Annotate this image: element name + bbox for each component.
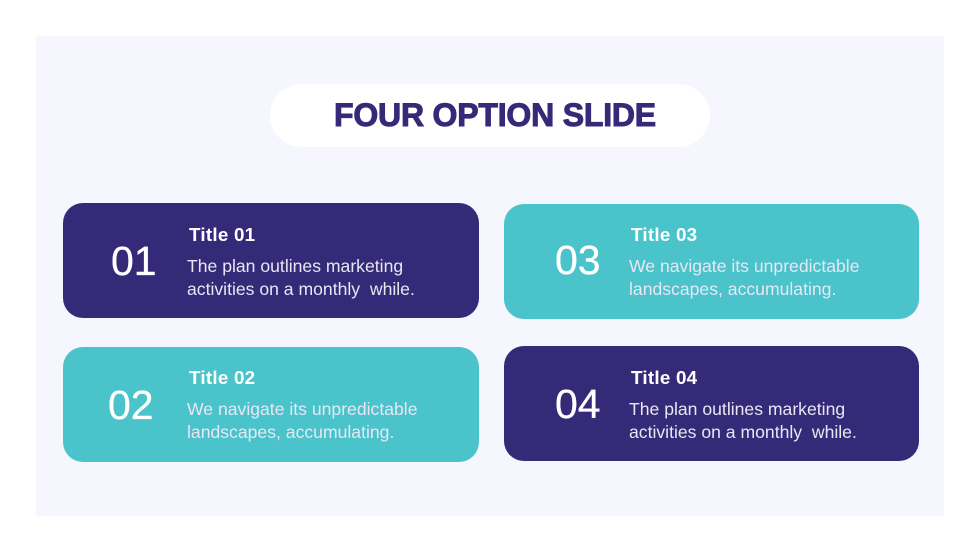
number 04: 04 [555,381,601,427]
number 01: 01 [111,238,157,284]
text: description 01 [187,256,415,299]
heading: title 04: Title 04 [631,367,697,388]
text: description 03: landscapes, accumulating. [629,279,836,299]
text: description 02: landscapes, accumulating. [187,422,394,442]
panel: option 04 [504,346,919,461]
panel: option 01 [63,203,479,318]
text: description 04: activities on a monthly while. [629,422,857,442]
title: FOUR OPTION SLIDE [334,97,656,133]
panel: option 02 [63,347,479,462]
text: description 04 [629,399,857,442]
heading: title 01: Title 01 [189,224,255,245]
text: description 04: The plan outlines marketing [629,399,845,419]
text: description 03 [629,256,860,299]
heading: title 03: Title 03 [631,224,697,245]
text: description 01: The plan outlines marketing [187,256,403,276]
heading: title 02: Title 02 [189,367,255,388]
number 03: 03 [555,237,601,283]
number 02: 02 [108,382,154,428]
text: description 02 [187,399,418,442]
text: description 02: We navigate its unpredictable [187,399,418,419]
text: description 01: activities on a monthly while. [187,279,415,299]
text: description 03: We navigate its unpredictable [629,256,860,276]
title pill [270,84,710,147]
panel: option 03 [504,204,919,319]
